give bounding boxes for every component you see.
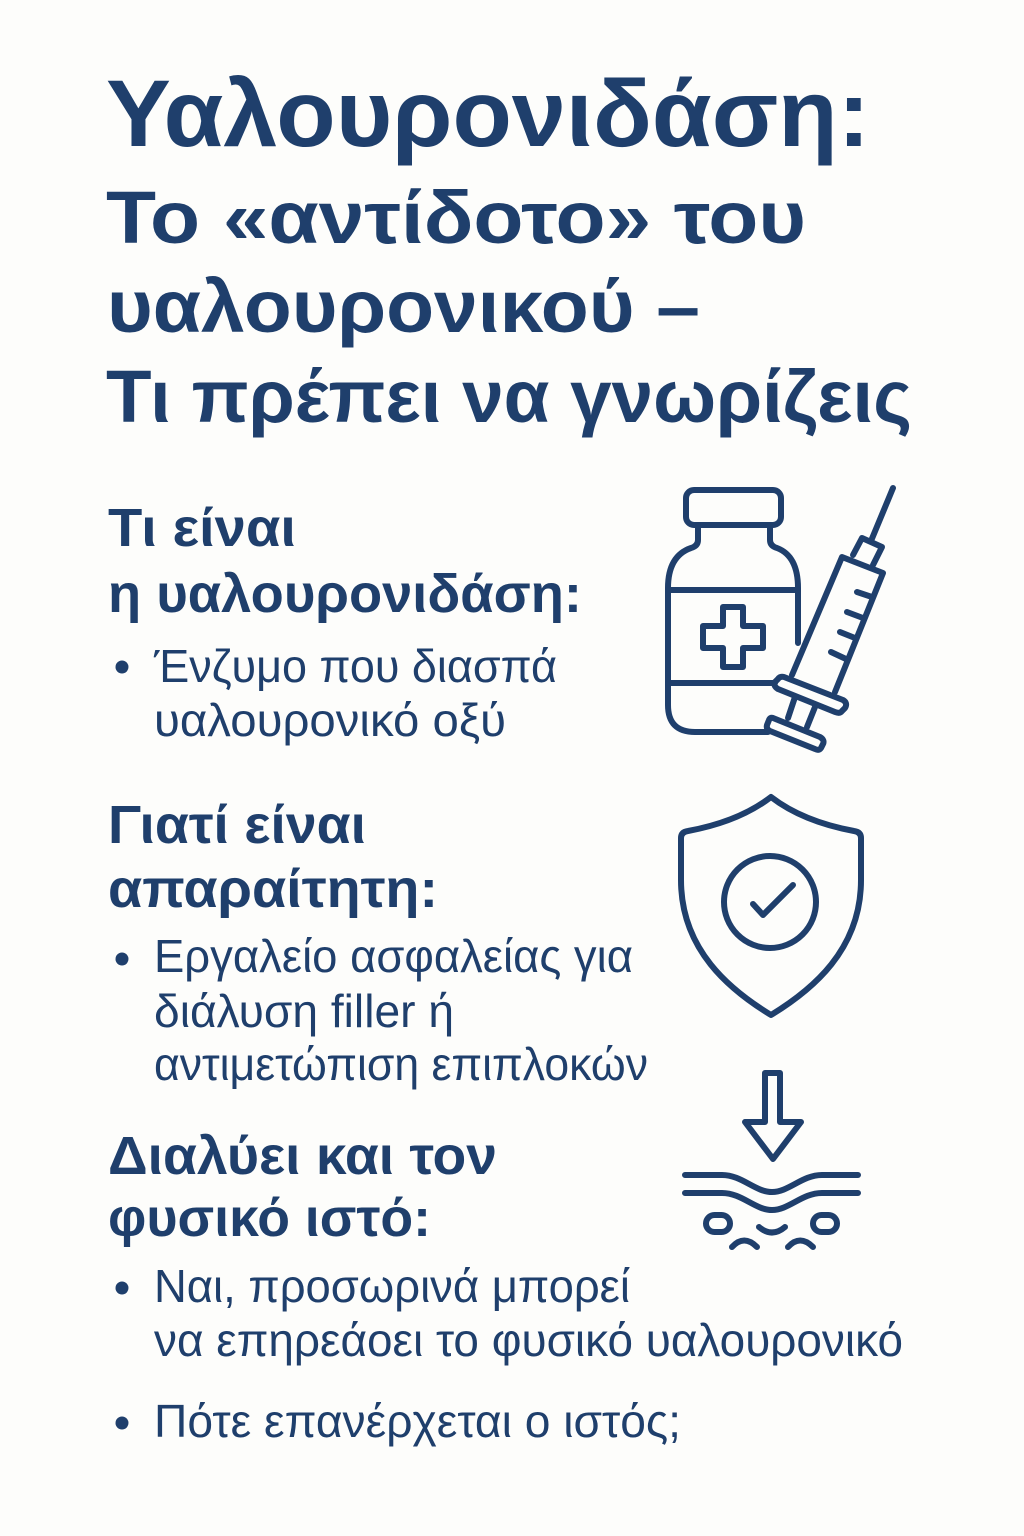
title: Υαλουρονιδάση: bbox=[106, 61, 870, 167]
bullet: temporarily affects: να επηρεάοει το φυσικό υαλουρονικό bbox=[154, 1314, 903, 1366]
title bbox=[106, 61, 912, 438]
panel: why it is needed bbox=[108, 795, 861, 1090]
heading: dissolves natural tissue bbox=[108, 1126, 497, 1248]
bullet: safety tool: διάλυση filler ή bbox=[154, 985, 454, 1037]
bullet: safety tool: αντιμετώπιση επιπλοκών bbox=[154, 1038, 648, 1090]
bullet: safety tool bbox=[116, 930, 648, 1090]
heading: dissolves natural tissue: Διαλύει και τον bbox=[108, 1126, 497, 1186]
bullet: enzyme: υαλουρονικό οξύ bbox=[154, 694, 506, 746]
title: Τι πρέπει να γνωρίζεις bbox=[106, 355, 912, 438]
icon: arrow into skin bbox=[685, 1073, 858, 1247]
heading: why it is needed bbox=[108, 795, 438, 919]
bullet: temporarily affects bbox=[116, 1260, 903, 1366]
bullet: safety tool: Εργαλείο ασφαλείας για bbox=[154, 930, 633, 982]
heading: what it is: Τι είναι bbox=[108, 498, 296, 558]
bullet: when tissue returns: Πότε επανέρχεται ο ιστός; bbox=[154, 1395, 681, 1447]
panel: dissolves natural tissue bbox=[108, 1073, 903, 1447]
panel: what it is bbox=[108, 488, 893, 750]
heading: what it is: η υαλουρονιδάση: bbox=[108, 564, 582, 624]
bullet: enzyme: Ένζυμο που διασπά bbox=[153, 640, 557, 692]
title: Το «αντίδοτο» του bbox=[106, 176, 806, 259]
icon: vial and syringe bbox=[668, 488, 893, 750]
icon: shield with check bbox=[681, 797, 861, 1015]
heading: why it is needed: απαραίτητη: bbox=[108, 859, 438, 919]
heading: why it is needed: Γιατί είναι bbox=[108, 795, 366, 855]
heading: dissolves natural tissue: φυσικό ιστό: bbox=[108, 1188, 431, 1248]
heading: what it is bbox=[108, 498, 582, 624]
bullet: enzyme bbox=[116, 640, 557, 746]
bullet: temporarily affects: Ναι, προσωρινά μπορεί bbox=[154, 1260, 630, 1312]
title: υαλουρονικού – bbox=[107, 265, 700, 348]
